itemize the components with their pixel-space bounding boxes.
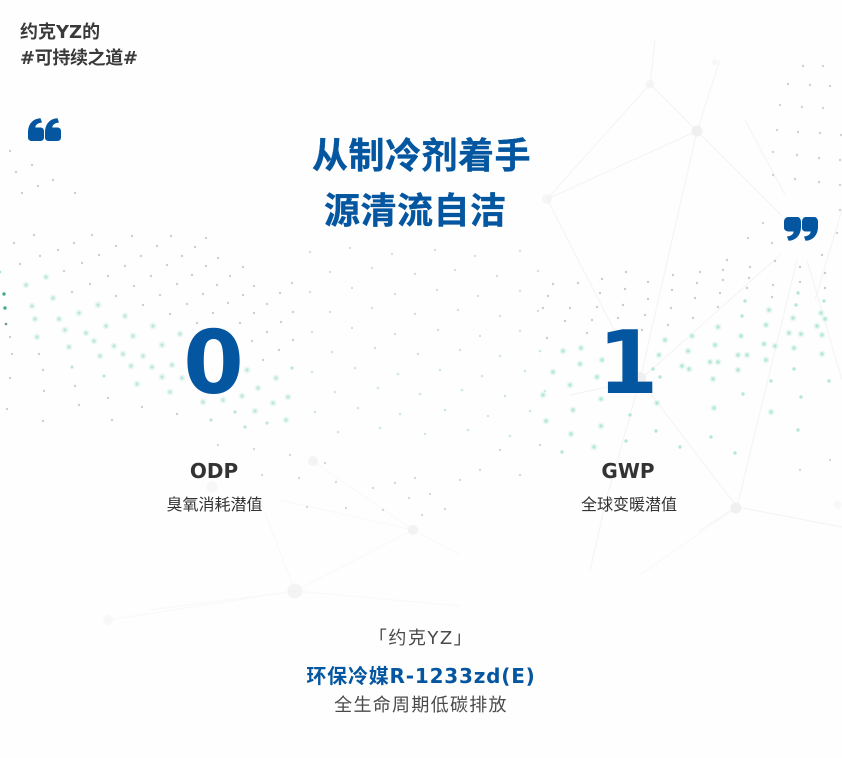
ODP description: 臭氧消耗潜值 [166, 491, 263, 515]
metric: GWP [581, 312, 677, 515]
background grey dot field [7, 66, 841, 515]
title [312, 127, 531, 234]
footer text block [306, 628, 536, 717]
title: 源清流自洁 [324, 182, 507, 234]
brand tag: #可持续之道# [20, 47, 138, 69]
background network lines [108, 40, 842, 620]
metric: ODP [166, 312, 263, 515]
background green dot field [0, 272, 829, 453]
ODP value: 0 [183, 312, 244, 414]
brand tag [20, 22, 138, 69]
footer brand: 「约克YZ」 [369, 628, 473, 649]
footer product: 环保冷媒R-1233zd(E) [306, 664, 536, 688]
icon: closing quote mark [784, 217, 818, 241]
ODP label: ODP [190, 459, 238, 483]
footer description: 全生命周期低碳排放 [334, 691, 508, 717]
GWP value: 1 [598, 312, 658, 414]
GWP description: 全球变暖潜值 [581, 491, 677, 515]
background network nodes [103, 59, 842, 625]
title: 从制冷剂着手 [312, 127, 531, 179]
GWP label: GWP [601, 459, 655, 483]
brand tag: 约克YZ的 [20, 22, 100, 43]
icon: opening quote mark [28, 118, 61, 141]
